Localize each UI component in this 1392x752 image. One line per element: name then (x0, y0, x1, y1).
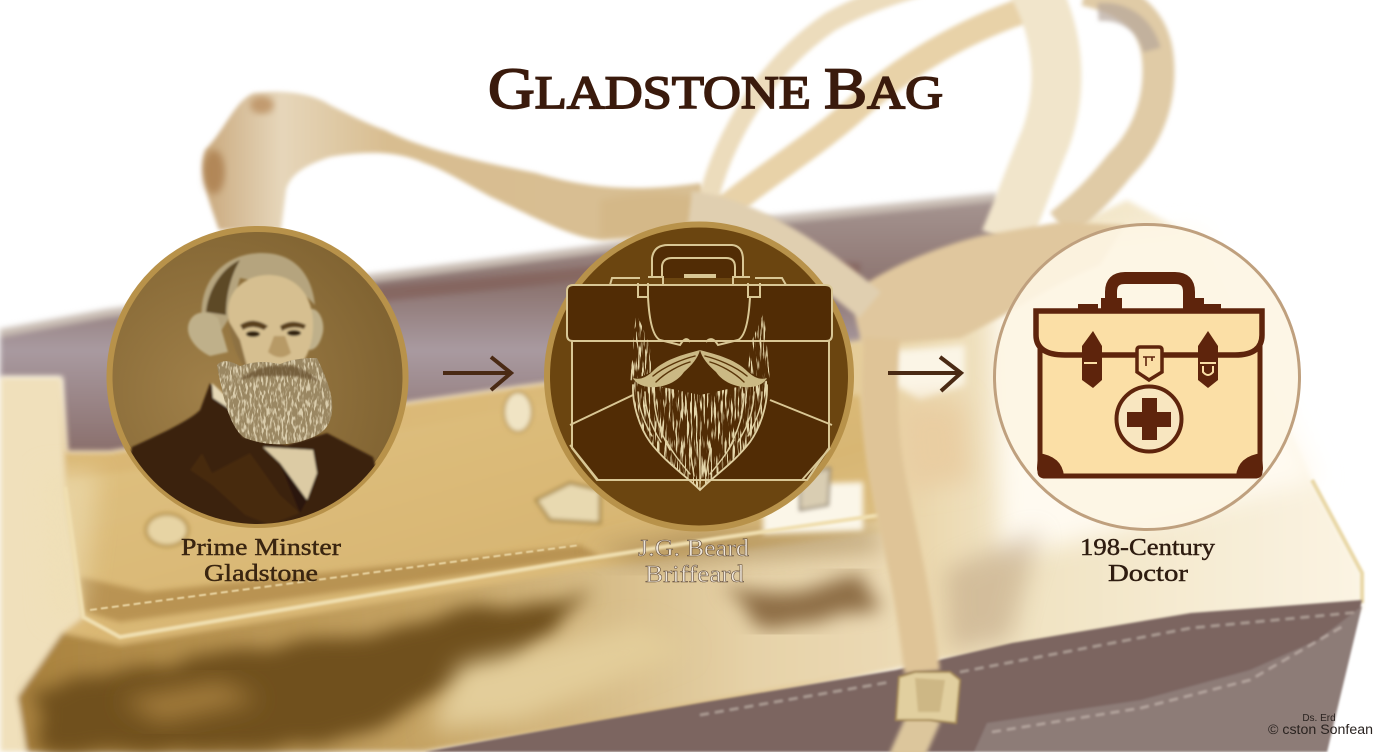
title: GLADSTONE BAG (488, 56, 943, 121)
label: Prime Minster Gladstone (181, 534, 341, 587)
beard line art (630, 312, 770, 491)
label: Prime Minster Gladstone: Gladstone (204, 560, 318, 587)
briefcase line art (567, 245, 832, 480)
ribbon buckle (896, 672, 960, 723)
ribbon knot and lower strap (690, 208, 1125, 752)
portrait ring (110, 229, 406, 525)
label: 198-Century Doctor (1080, 534, 1216, 587)
medallion ring (547, 224, 851, 528)
ribbon left loop (202, 92, 730, 240)
bag lower mauve panels (424, 600, 1362, 752)
metal clasps on the bag (146, 392, 830, 546)
label: 198-Century Doctor: 198-Century (1080, 534, 1216, 561)
credit line: Ds. Erd (1302, 713, 1336, 724)
portrait figure (130, 252, 376, 524)
metallic reflections on the gold (35, 230, 1362, 752)
label: J.G. Beard Briffeard: J.G. Beard (638, 535, 749, 562)
panel: doctor's bag medallion (994, 224, 1300, 530)
arrow: briefcase to doctor's bag (888, 357, 961, 391)
panel: Prime Minister portrait medallion (110, 229, 406, 540)
arrow: portrait to briefcase (443, 357, 511, 390)
label: Prime Minster Gladstone: Prime Minster (181, 534, 341, 561)
label: J.G. Beard Briffeard: Briffeard (645, 561, 744, 588)
medallion ring (994, 224, 1300, 530)
panel: beard and briefcase medallion (547, 224, 851, 528)
label: 198-Century Doctor: Doctor (1108, 560, 1188, 587)
label: J.G. Beard Briffeard (638, 535, 749, 588)
icon: doctor's medical bag (1036, 278, 1263, 476)
bag gold body (0, 200, 1362, 752)
credit line: © cston Sonfean (1268, 722, 1373, 737)
credit line (1268, 713, 1373, 737)
ribbon upper loops and straps (703, 0, 1158, 240)
bag rear mauve panel (0, 197, 1040, 452)
